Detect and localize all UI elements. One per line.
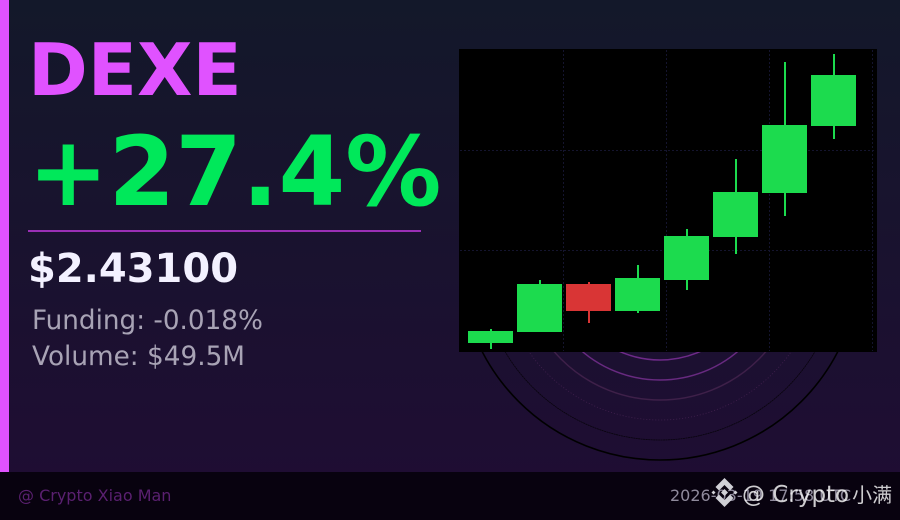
candle 8 xyxy=(811,54,856,139)
concentric rings xyxy=(460,60,860,460)
funding rate: Funding: -0.018% xyxy=(32,306,263,336)
candle 5 xyxy=(664,229,709,290)
candle 6 xyxy=(713,159,758,254)
candle 7 xyxy=(762,62,807,216)
candle 3 xyxy=(566,282,611,323)
footer timestamp: 2026-03-19 17:58 UTC xyxy=(670,486,851,505)
volume: Volume: $49.5M xyxy=(32,342,245,372)
ticker title: DEXE xyxy=(28,28,242,112)
candle 2 xyxy=(517,280,562,332)
divider xyxy=(28,230,421,232)
footer handle: @ Crypto Xiao Man xyxy=(18,486,171,505)
footer bar xyxy=(0,472,900,520)
price: $2.43100 xyxy=(28,246,238,292)
icon: watermark diamond xyxy=(712,478,738,507)
percent change: +27.4% xyxy=(28,116,441,228)
watermark text: @ Crypto小满 xyxy=(742,482,892,508)
candlestick chart xyxy=(459,49,877,352)
accent bar xyxy=(0,0,9,472)
candle 4 xyxy=(615,265,660,313)
candle 1 xyxy=(468,329,513,349)
